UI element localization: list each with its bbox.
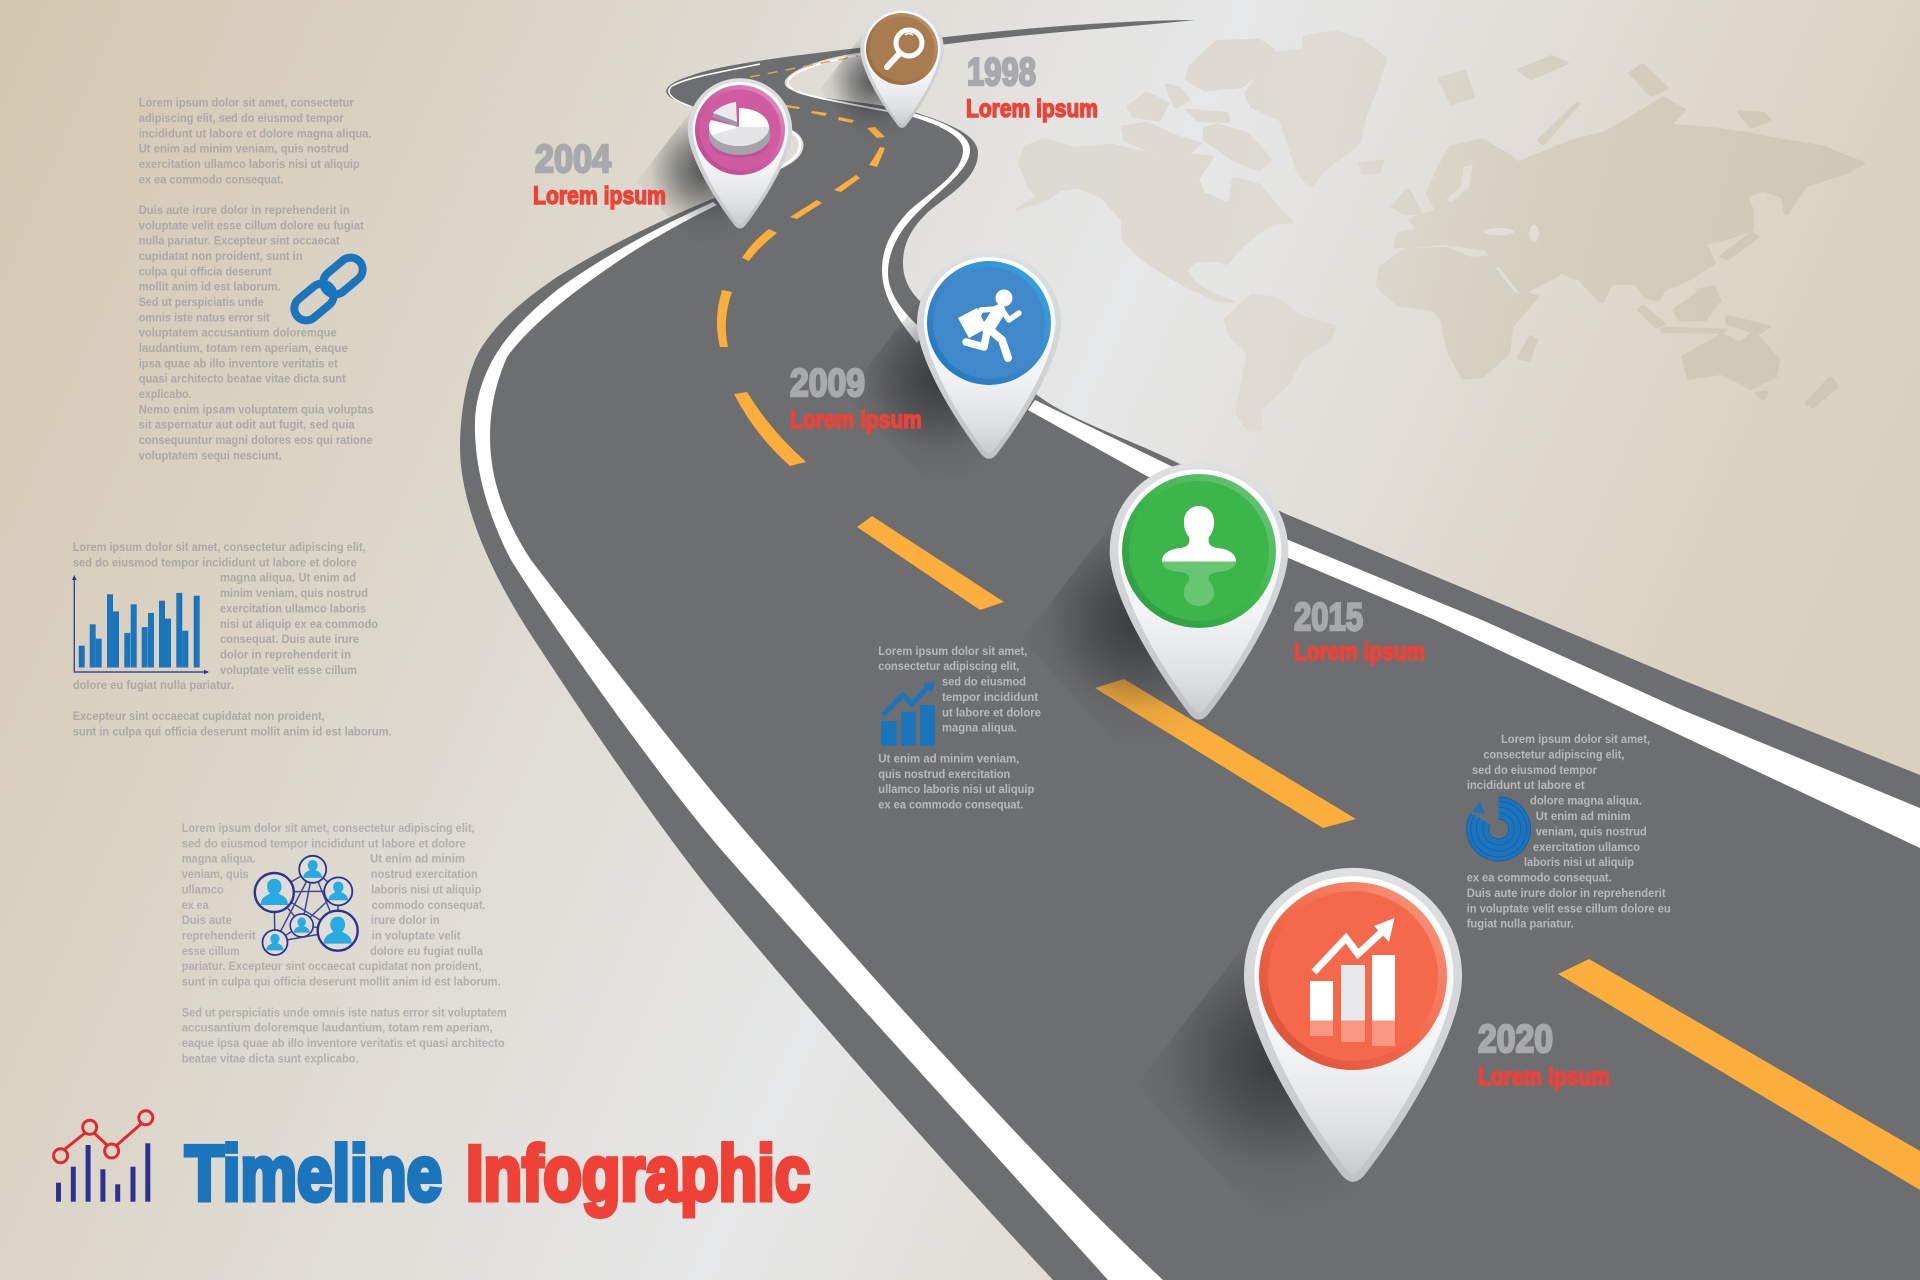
title xyxy=(185,1129,810,1217)
text block: on road centre: ut labore et dolore xyxy=(942,705,1041,719)
text block: middle left: exercitation ullamco laboris xyxy=(220,601,366,615)
text block: middle left: consequat. Duis aute irure xyxy=(220,632,359,646)
text block: middle left: minim veniam, quis nostrud xyxy=(220,586,368,600)
text block: top left: voluptatem sequi nesciunt. xyxy=(139,448,282,462)
icon: small growth chart xyxy=(881,682,935,746)
text block: lower left: beatae vitae dicta sunt explicabo. xyxy=(182,1051,359,1065)
text block: on road right: Ut enim ad minim xyxy=(1536,809,1631,823)
text block: top left: laudantium, totam rem aperiam, eaque xyxy=(139,341,348,355)
text block: on road right: sed do eiusmod tempor xyxy=(1472,763,1597,777)
text block: top left: ipsa quae ab illo inventore veritatis et xyxy=(139,356,338,370)
text block: top left: culpa qui officia deserunt xyxy=(139,264,272,278)
text block: middle left: sunt in culpa qui officia deserunt mollit anim id est laborum. xyxy=(73,724,392,738)
text block: middle left: dolore eu fugiat nulla pariatur. xyxy=(73,678,234,692)
icon: bars with arrow xyxy=(1310,918,1395,1046)
label: 2009 xyxy=(790,362,922,434)
pin: 2020 growth chart xyxy=(1137,868,1462,1280)
text block: on road centre: Ut enim ad minim veniam, xyxy=(878,752,1019,766)
icon: pie chart xyxy=(709,102,770,158)
text block: middle left: magna aliqua. Ut enim ad xyxy=(220,571,356,585)
text block: lower left: reprehenderit xyxy=(182,928,256,942)
text block: on road right xyxy=(1467,732,1671,931)
hairpin thin stripes xyxy=(669,55,900,170)
text block: top left: explicabo. xyxy=(139,387,192,401)
left road edge stripe xyxy=(475,202,1163,1280)
text block: lower left: commodo consequat. xyxy=(372,898,486,912)
label: 1998: 1998 xyxy=(967,51,1036,94)
text block: middle left: nisi ut aliquip ex ea commodo xyxy=(220,617,378,631)
text block: top left: Duis aute irure dolor in reprehenderit in xyxy=(139,203,350,217)
text block: on road centre: quis nostrud exercitation xyxy=(878,767,1010,781)
centre line dashes xyxy=(717,56,1920,1190)
text block: top left: cupidatat non proident, sunt in xyxy=(139,249,303,263)
title: Timeline xyxy=(185,1129,442,1217)
label: 2004: Lorem ipsum xyxy=(533,182,666,210)
text block: middle left: Excepteur sint occaecat cupidatat non proident, xyxy=(73,709,325,723)
text block: on road centre: consectetur adipiscing elit, xyxy=(878,659,1019,673)
text block: top left xyxy=(139,96,374,462)
text block: lower left: Duis aute xyxy=(182,913,232,927)
label: 2020: Lorem ipsum xyxy=(1478,1063,1610,1091)
text block: lower left: eaque ipsa quae ab illo inventore veritatis et quasi architecto xyxy=(182,1036,505,1050)
text block: top left: Lorem ipsum dolor sit amet, consectetur xyxy=(139,96,354,110)
text block: on road centre xyxy=(878,644,1041,812)
text block: lower left: ex ea xyxy=(182,898,209,912)
label: 2009: Lorem ipsum xyxy=(790,406,922,434)
text block: on road centre: sed do eiusmod xyxy=(942,675,1026,689)
text block: lower left: Ut enim ad minim xyxy=(370,852,465,866)
label: 2020 xyxy=(1478,1018,1610,1091)
text block: middle left: dolor in reprehenderit in xyxy=(220,648,351,662)
label: 2009: 2009 xyxy=(790,362,865,405)
label: 1998 xyxy=(966,51,1098,123)
text block: middle left: voluptate velit esse cillum xyxy=(220,663,357,677)
text block: on road right: incididunt ut labore et xyxy=(1467,778,1585,792)
text block: on road centre: ullamco laboris nisi ut aliquip xyxy=(878,782,1035,796)
pin: 2015 stamp person xyxy=(1022,462,1288,813)
text block: on road centre: tempor incididunt xyxy=(942,690,1038,704)
text block: lower left: Sed ut perspiciatis unde omnis iste natus error sit voluptatem xyxy=(182,1005,507,1019)
text block: on road right: ex ea commodo consequat. xyxy=(1467,870,1612,884)
text block: on road right: Lorem ipsum dolor sit amet, xyxy=(1501,732,1650,746)
right road edge stripe xyxy=(1028,400,1920,848)
label: 1998: Lorem ipsum xyxy=(966,95,1098,123)
text block: middle left xyxy=(73,540,392,738)
text block: lower left: pariatur. Excepteur sint occaecat cupidatat non proident, xyxy=(182,959,482,973)
text block: on road centre: Lorem ipsum dolor sit amet, xyxy=(878,644,1027,658)
text block: lower left: sed do eiusmod tempor incididunt ut labore et dolore xyxy=(182,836,466,850)
icon: running businessman xyxy=(958,290,1019,358)
text block: on road right: dolore magna aliqua. xyxy=(1530,794,1642,808)
label: 2004 xyxy=(533,138,666,210)
text block: top left: mollit anim id est laborum. xyxy=(139,280,281,294)
text block: top left: exercitation ullamco laboris nisi ut aliquip xyxy=(139,157,360,171)
icon: person stamp xyxy=(1162,506,1236,606)
text block: lower left: nostrud exercitation xyxy=(371,867,478,881)
text block: top left: sit aspernatur aut odit aut fugit, sed quia xyxy=(139,418,355,432)
text block: on road right: Duis aute irure dolor in reprehenderit xyxy=(1467,886,1666,900)
text block: lower left: dolore eu fugiat nulla xyxy=(370,944,483,958)
pin: 2004 pie chart xyxy=(636,78,792,283)
icon: people network xyxy=(255,856,358,955)
label: 2020: 2020 xyxy=(1478,1018,1553,1061)
bar chart xyxy=(72,575,209,674)
label: 2004: 2004 xyxy=(535,138,611,181)
text block: on road centre: magna aliqua. xyxy=(942,721,1017,735)
text block: middle left: Lorem ipsum dolor sit amet, consectetur adipiscing elit, xyxy=(73,540,366,554)
world map xyxy=(1018,32,1863,430)
text block: top left: Ut enim ad minim veniam, quis nostrud xyxy=(139,142,349,156)
upper right stripe xyxy=(882,109,970,343)
text block: middle left: sed do eiusmod tempor incididunt ut labore et dolore xyxy=(73,555,357,569)
pin: 1998 magnifier xyxy=(819,8,944,171)
label: 2015: Lorem ipsum xyxy=(1294,638,1425,666)
title: Infographic xyxy=(466,1129,810,1217)
text block: on road centre: ex ea commodo consequat. xyxy=(878,798,1023,812)
text block: top left: ex ea commodo consequat. xyxy=(139,172,284,186)
text block: top left: voluptatem accusantium doloremque xyxy=(139,326,337,340)
label: 2015 xyxy=(1294,596,1425,666)
text block: on road right: exercitation ullamco xyxy=(1533,840,1640,854)
text block: top left: Nemo enim ipsam voluptatem quia voluptas xyxy=(139,402,374,416)
text block: lower left xyxy=(182,821,507,1065)
title icon: line and bars xyxy=(54,1111,153,1202)
text block: lower left: sunt in culpa qui officia deserunt mollit anim id est laborum. xyxy=(182,975,501,989)
text block: top left: Sed ut perspiciatis unde xyxy=(139,295,264,309)
icon: chain link xyxy=(289,253,368,325)
text block: top left: quasi architecto beatae vitae dicta sunt xyxy=(139,372,346,386)
text block: lower left: esse cillum xyxy=(182,944,240,958)
road xyxy=(460,20,1920,1280)
pin: 2009 runner xyxy=(846,252,1061,534)
text block: lower left: ullamco xyxy=(182,882,224,896)
text block: lower left: veniam, quis xyxy=(182,867,249,881)
text block: top left: incididunt ut labore et dolore magna aliqua. xyxy=(139,126,372,140)
text block: top left: adipiscing elit, sed do eiusmod tempor xyxy=(139,111,344,125)
text block: lower left: magna aliqua. xyxy=(182,852,256,866)
text block: on road right: fugiat nulla pariatur. xyxy=(1467,917,1574,931)
text block: top left: nulla pariatur. Excepteur sint occaecat xyxy=(139,234,340,248)
text block: top left: voluptate velit esse cillum dolore eu fugiat xyxy=(139,218,364,232)
text block: lower left: irure dolor in xyxy=(371,913,440,927)
icon: radial chart xyxy=(1467,797,1531,861)
text block: on road right: veniam, quis nostrud xyxy=(1536,824,1647,838)
text block: lower left: Lorem ipsum dolor sit amet, consectetur adipiscing elit, xyxy=(182,821,475,835)
text block: top left: consequuntur magni dolores eos qui ratione xyxy=(139,433,373,447)
text block: top left: omnis iste natus error sit xyxy=(139,310,270,324)
text block: lower left: accusantium doloremque laudantium, totam rem aperiam, xyxy=(182,1021,493,1035)
text block: on road right: laboris nisi ut aliquip xyxy=(1524,855,1634,869)
text block: on road right: in voluptate velit esse cillum dolore eu xyxy=(1467,901,1671,915)
label: 2015: 2015 xyxy=(1294,596,1363,639)
text block: lower left: laboris nisi ut aliquip xyxy=(371,882,482,896)
icon: magnifying glass xyxy=(887,30,922,67)
text block: lower left: in voluptate velit xyxy=(372,928,461,942)
text block: on road right: consectetur adipiscing elit, xyxy=(1483,747,1624,761)
